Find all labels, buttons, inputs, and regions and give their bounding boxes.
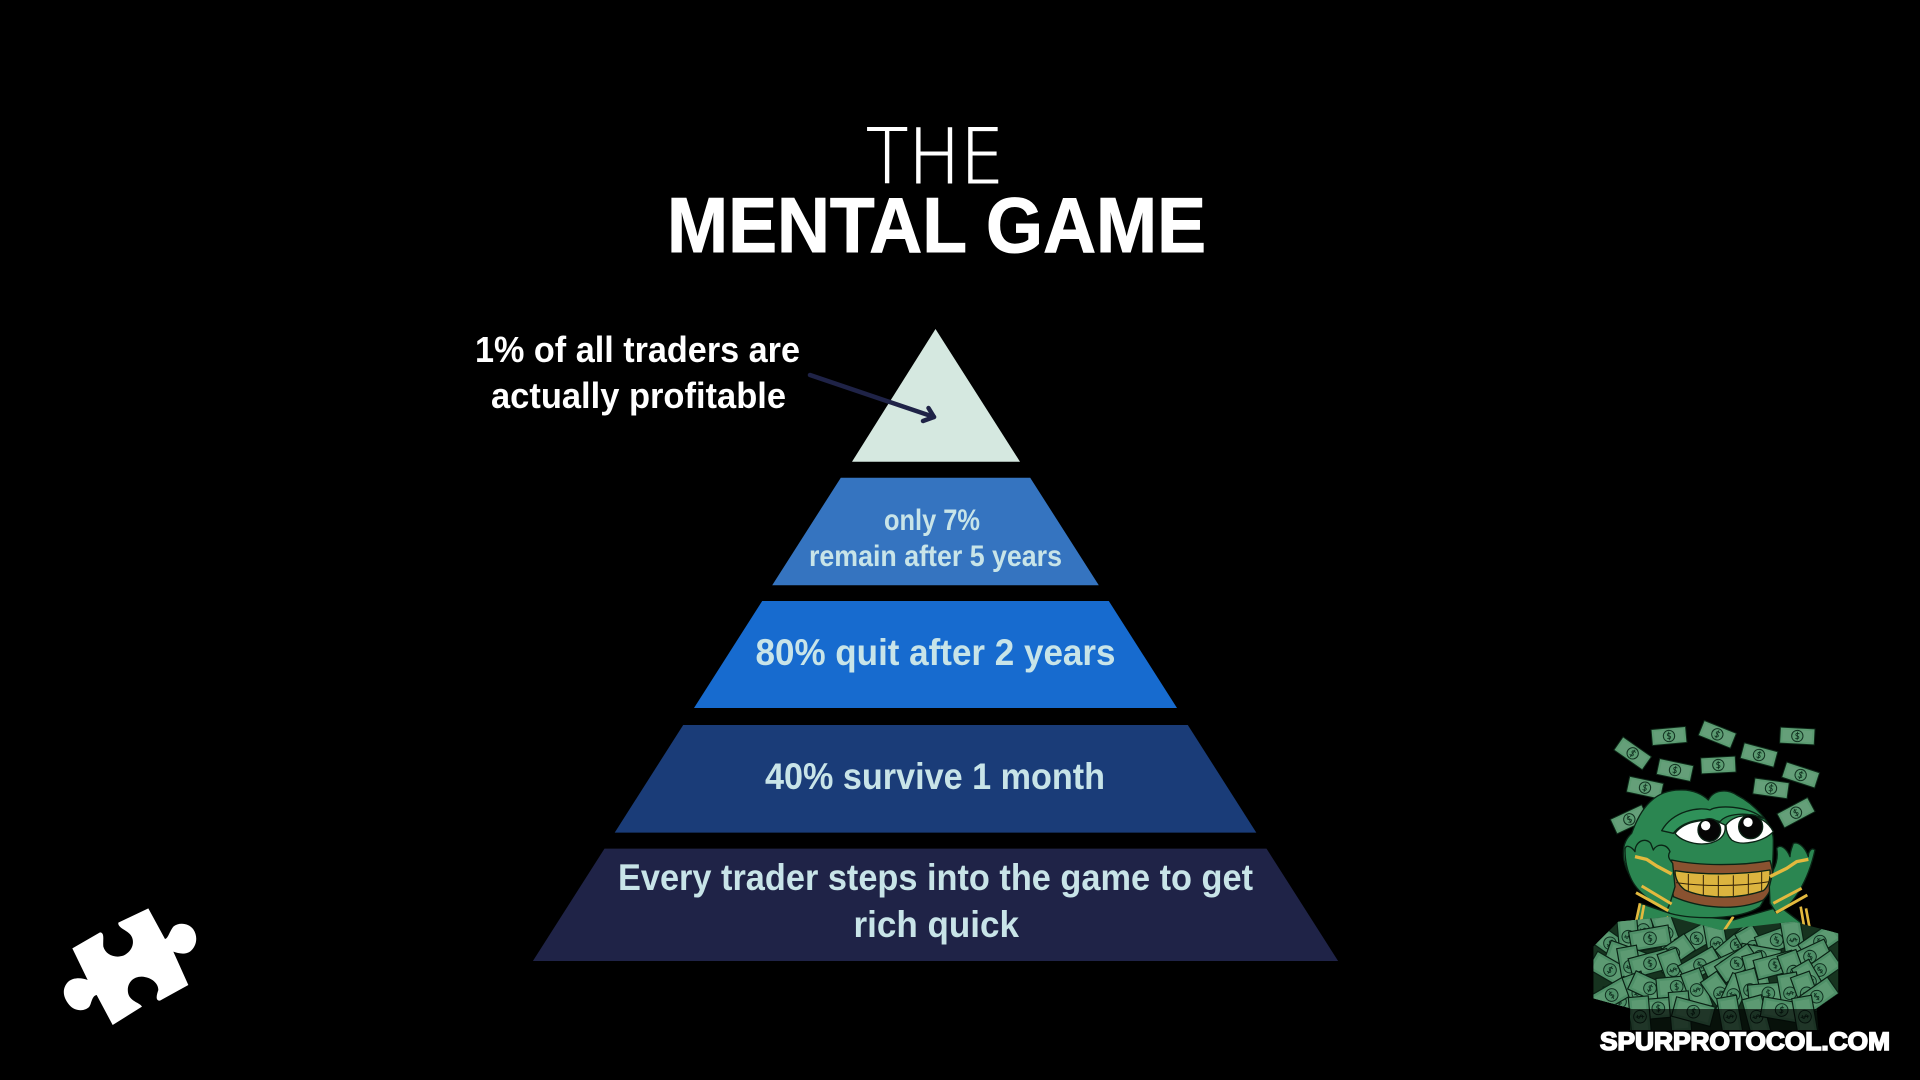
- frog figure: [1623, 790, 1815, 940]
- gold teeth: [1675, 870, 1770, 897]
- frog brows: [1662, 807, 1763, 833]
- icon: frog mascot with money: [1588, 720, 1843, 1039]
- bracelets: [1636, 886, 1807, 913]
- falling banknotes: [1610, 720, 1820, 834]
- icon: puzzle piece: [64, 908, 196, 1025]
- arrow: callout to apex: [810, 375, 934, 421]
- callout: 1% of all traders: 1% of all traders are: [475, 329, 800, 370]
- pyramid tier 5: every trader: [533, 849, 1338, 961]
- dark band over pile base: [1631, 1009, 1818, 1030]
- pyramid tier 2: only 7%: remain after 5 years: [809, 540, 1062, 573]
- pyramid tier 2: only 7%: [772, 478, 1099, 585]
- pupils: [1698, 819, 1721, 841]
- callout: 1% of all traders: [475, 329, 800, 416]
- left hand: [1625, 840, 1675, 911]
- pyramid tier 1: apex: [852, 329, 1020, 462]
- title line: THE: THE: [866, 112, 1004, 201]
- brand label: SPURPROTOCOL.COM: [1600, 1028, 1890, 1056]
- frog shoulders: [1635, 903, 1815, 940]
- pyramid tier 3: 80% quit: [694, 601, 1177, 708]
- right eye: [1726, 816, 1773, 843]
- pyramid tier 5: every trader: Every trader steps into the game to get: [618, 857, 1253, 898]
- pyramid tier 4: 40% survive: 40% survive 1 month: [765, 756, 1105, 797]
- callout: 1% of all traders: actually profitable: [491, 375, 786, 416]
- right hand: [1769, 843, 1815, 913]
- left eye: [1675, 820, 1725, 844]
- title line: MENTAL GAME: MENTAL GAME: [667, 181, 1206, 269]
- finger chains: [1635, 857, 1808, 877]
- pyramid tier 4: 40% survive: [615, 725, 1256, 833]
- money pile: [1593, 916, 1838, 1030]
- gold chain straps: [1635, 903, 1810, 932]
- mouth: [1671, 860, 1773, 907]
- pyramid tier 3: 80% quit: 80% quit after 2 years: [756, 632, 1116, 673]
- pyramid tier 5: every trader: rich quick: [854, 904, 1019, 945]
- pyramid: [533, 329, 1338, 961]
- pyramid tier 2: only 7%: only 7%: [884, 504, 980, 537]
- frog head: [1623, 790, 1773, 918]
- title: [667, 112, 1206, 269]
